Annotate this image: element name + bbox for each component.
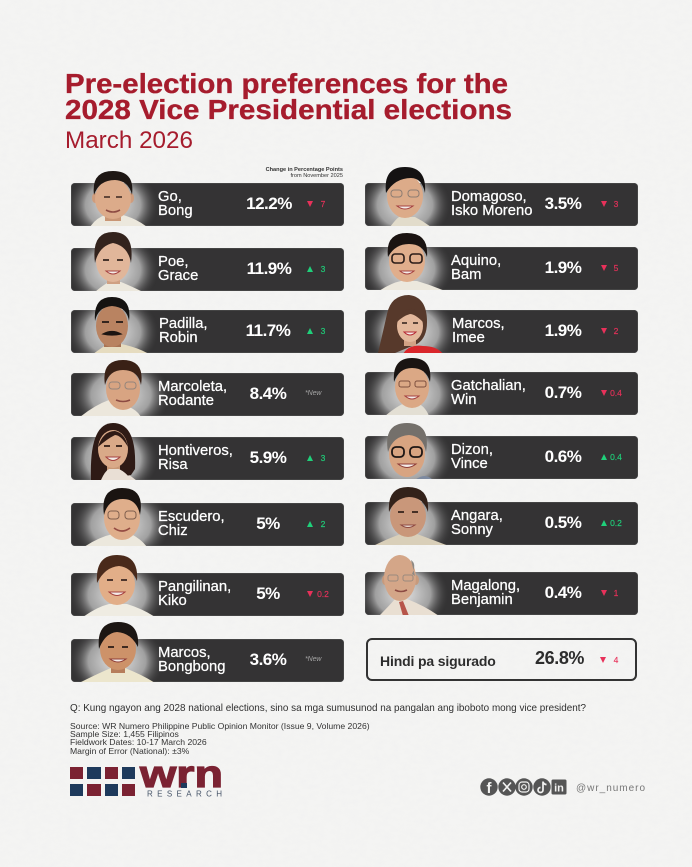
title: [65, 68, 512, 154]
name: Go,: [158, 189, 182, 205]
name: Isko Moreno: [451, 202, 532, 218]
change: up 3: [306, 328, 312, 334]
icon: tiktok: [533, 778, 551, 796]
change value: 3: [321, 264, 325, 274]
logo: WRN Research: RESEARCH: [147, 790, 222, 798]
portrait: Marcos Imee: [370, 295, 452, 353]
portrait: Magalong: [365, 555, 444, 615]
change: down 7: [306, 201, 312, 207]
change: down 4: [600, 657, 606, 663]
label: Hindi pa sigurado: [380, 653, 496, 669]
name: [158, 579, 231, 608]
name: [158, 254, 198, 284]
row: Escudero, Chiz: [71, 488, 344, 546]
percentage: 3.6%: [250, 650, 286, 669]
source notes: Fieldwork Dates: 10-17 March 2026: [70, 737, 207, 747]
change: up 0.2: [600, 520, 606, 526]
percentage: 5%: [256, 584, 280, 603]
name: Benjamin: [451, 592, 513, 608]
change: new entry: *New: [305, 656, 321, 663]
percentage: 1.9%: [545, 258, 581, 277]
name: [451, 189, 532, 218]
name: Magalong,: [451, 578, 520, 594]
bar: [71, 573, 344, 616]
change: up 3: [306, 266, 312, 272]
name: Grace: [158, 268, 198, 284]
change value: 0.4: [610, 452, 622, 462]
change value: 7: [321, 199, 325, 209]
icon: instagram: [515, 778, 533, 796]
name: Bongbong: [158, 658, 225, 674]
name: Bam: [451, 266, 481, 282]
change: up 0.4: [600, 454, 606, 460]
change: down 0.2: [306, 591, 312, 597]
percentage: 8.4%: [250, 384, 286, 403]
change value: 3: [321, 326, 325, 336]
row: Marcoleta, Rodante: [71, 360, 344, 416]
bar: [71, 183, 344, 226]
percentage: 0.5%: [545, 513, 581, 532]
row: Magalong, Benjamin: [365, 555, 638, 615]
change value: 2: [614, 326, 618, 336]
title: Pre-election preferences for the: [65, 68, 508, 99]
change value: 3: [614, 199, 618, 209]
percentage: 26.8%: [535, 648, 584, 668]
name: [450, 508, 503, 538]
portrait: Escudero: [76, 488, 166, 546]
portrait: Marcos Bongbong: [74, 622, 160, 682]
bar: [365, 183, 638, 226]
bar: [71, 248, 344, 291]
portrait: Marcoleta: [76, 360, 166, 416]
change: up 3: [306, 455, 312, 461]
name: Chiz: [158, 522, 188, 538]
portrait: Gatchalian: [368, 358, 454, 415]
bar: [365, 436, 638, 479]
name: Risa: [158, 456, 188, 472]
row: Poe, Grace: [71, 232, 344, 291]
name: Sonny: [451, 522, 493, 538]
title: March 2026: [65, 127, 193, 154]
name: Rodante: [158, 392, 214, 408]
bar: [71, 373, 344, 416]
row: Marcos, Imee: [365, 295, 638, 353]
name: Marcos,: [158, 645, 211, 661]
source notes: [70, 721, 370, 756]
percentage: 0.6%: [545, 447, 581, 466]
name: [451, 578, 520, 608]
name: [158, 509, 225, 538]
change: down 5: [600, 265, 606, 271]
portrait: Padilla: [72, 297, 154, 353]
name: [450, 442, 493, 472]
percentage: 0.7%: [545, 383, 581, 402]
name: [450, 378, 526, 408]
title: 2028 Vice Presidential elections: [65, 94, 512, 125]
name: [158, 443, 233, 472]
row: Hontiveros, Risa: [71, 423, 344, 480]
panel: Hindi pa sigurado: [366, 638, 637, 681]
name: Imee: [452, 330, 485, 346]
change: new entry: *New: [305, 390, 321, 397]
name: Marcoleta,: [158, 379, 227, 395]
source notes: Margin of Error (National): ±3%: [70, 746, 189, 756]
name: Hontiveros,: [158, 443, 233, 459]
name: Angara,: [451, 508, 503, 524]
name: [159, 316, 208, 346]
name: Bong: [158, 202, 193, 218]
change: down 2: [600, 328, 606, 334]
source notes: Source: WR Numero Philippine Public Opinion Monitor (Issue 9, Volume 2026): [70, 721, 370, 731]
survey question: Q: Kung ngayon ang 2028 national elections, sino sa mga sumusunod na pangalan ang iboboto mong vice president?: [70, 702, 586, 714]
portrait: Hontiveros: [72, 423, 154, 480]
bar: [365, 372, 638, 415]
icon: facebook: f: [486, 780, 492, 797]
row: Pangilinan, Kiko: [71, 555, 344, 616]
name: Escudero,: [158, 509, 225, 525]
portrait: Pangilinan: [74, 555, 160, 616]
percentage: 0.4%: [545, 583, 581, 602]
name: Kiko: [158, 592, 187, 608]
social handle: @wr_numero: [576, 783, 645, 794]
portrait: Angara: [366, 487, 448, 545]
bar: [365, 310, 638, 353]
row: Domagoso, Isko Moreno: [365, 167, 638, 226]
row: Marcos, Bongbong: [71, 622, 344, 682]
name: [450, 253, 501, 282]
row: Dizon, Vince: [365, 423, 638, 479]
change: down 1: [600, 590, 606, 596]
change: down 0.4: [600, 390, 606, 396]
name: Dizon,: [451, 442, 493, 458]
change value: 0.2: [317, 589, 329, 599]
social icons: [480, 778, 566, 797]
change: down 3: [600, 201, 606, 207]
change value: 0.2: [610, 518, 622, 528]
portrait: Poe: [72, 232, 154, 291]
name: Padilla,: [159, 316, 208, 332]
change value: 4: [614, 655, 618, 665]
name: Aquino,: [451, 253, 501, 269]
change value: 2: [321, 519, 325, 529]
change value: 1: [614, 588, 618, 598]
percentage: 12.2%: [246, 194, 292, 213]
name: Marcos,: [452, 316, 505, 332]
percentage: 11.7%: [246, 321, 290, 340]
name: [158, 379, 227, 408]
name: Gatchalian,: [451, 378, 526, 394]
bar: [365, 572, 638, 615]
logo: WRN Research: [70, 760, 223, 798]
row: Gatchalian, Win: [365, 358, 638, 415]
bar: [71, 639, 344, 682]
percentage: 5.9%: [250, 448, 286, 467]
name: Robin: [159, 330, 198, 346]
row: Angara, Sonny: [365, 487, 638, 545]
row: Padilla, Robin: [71, 297, 344, 353]
bar: [71, 310, 344, 353]
name: Win: [451, 392, 476, 408]
bar: [71, 503, 344, 546]
change column caption: Change in Percentage Points: [266, 167, 343, 173]
portrait: Go: [72, 171, 154, 226]
percentage: 11.9%: [247, 259, 291, 278]
portrait: Dizon: [366, 423, 448, 479]
name: [452, 316, 505, 346]
change value: 0.4: [610, 388, 622, 398]
change: up 2: [306, 521, 312, 527]
change column caption: from November 2025: [290, 173, 343, 179]
name: Pangilinan,: [158, 579, 231, 595]
percentage: 3.5%: [545, 194, 581, 213]
change value: 3: [321, 453, 325, 463]
row: Aquino, Bam: [365, 233, 638, 290]
name: [158, 645, 225, 674]
name: Poe,: [158, 254, 188, 270]
portrait: Aquino: [366, 233, 448, 290]
portrait: Domagoso: [366, 167, 446, 226]
change column caption: [266, 167, 343, 179]
icon: X: [498, 778, 516, 796]
name: Domagoso,: [451, 189, 527, 205]
bar: [365, 502, 638, 545]
icon: linkedin: in: [554, 782, 564, 794]
name: [158, 189, 193, 218]
percentage: 1.9%: [545, 321, 581, 340]
bar: [71, 437, 344, 480]
row: Go, Bong: [71, 171, 344, 226]
change value: 5: [614, 263, 618, 273]
source notes: Sample Size: 1,455 Filipinos: [70, 729, 179, 739]
name: Vince: [451, 456, 488, 472]
bar: [365, 247, 638, 290]
percentage: 5%: [256, 514, 280, 533]
